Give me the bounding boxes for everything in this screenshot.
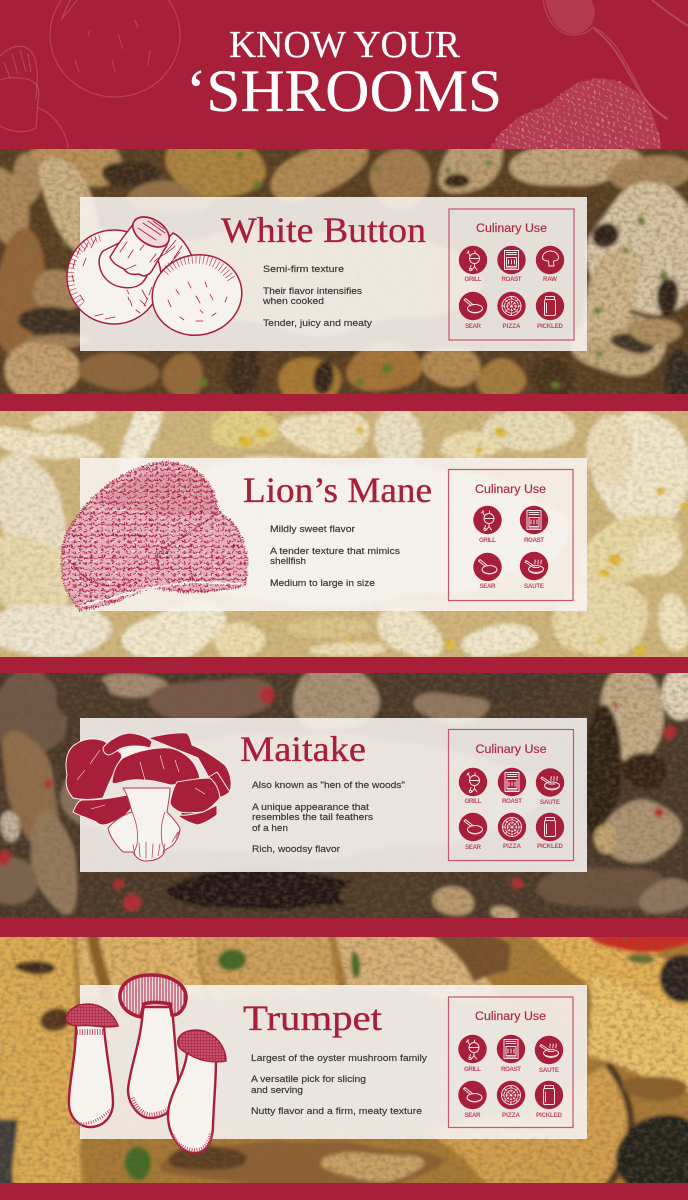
heading: trumpet: Trumpet [243,998,382,1038]
use: roast: ROAST [502,276,522,283]
text: characteristics: A unique appearance that [252,802,369,813]
title [186,24,502,124]
illustration: lion's mane mushroom [62,462,247,610]
title line: know your: KNOW YOUR [229,24,461,66]
use: raw: RAW [543,276,557,283]
culinary use box [448,470,573,600]
illustration: maitake mushroom [66,733,231,861]
text: characteristics [270,524,400,589]
use: sear: SEAR [464,1112,481,1119]
use: sear: SEAR [480,583,496,590]
text: characteristics: Rich, woodsy flavor [252,844,341,855]
text: characteristics: A tender texture that mimics [270,546,400,557]
text: characteristics: Tender, juicy and meaty [263,318,372,329]
text: characteristics: Nutty flavor and a firm, meaty texture [251,1106,422,1117]
header sketch art [0,0,688,149]
use: roast: ROAST [502,798,522,805]
text: characteristics: when cooked [262,296,324,307]
photo: grilled trumpet mushrooms [0,937,688,1183]
text: characteristics: resembles the tail feathers [252,812,373,823]
heading: lion's mane: Lion’s Mane [243,470,432,510]
text: characteristics: Semi-firm texture [263,264,344,275]
culinary use box [448,730,574,860]
heading: white button: White Button [221,210,426,250]
use: saute: SAUTE [524,583,544,590]
text: characteristics: Medium to large in size [270,578,375,589]
culinary use box: Culinary Use [475,1011,546,1023]
use: saute: SAUTE [540,799,560,806]
use: pickled: PICKLED [537,323,564,330]
use: pizza: PIZZA [502,323,521,330]
section 4: trumpet [66,975,587,1153]
illustration: trumpet mushrooms [66,975,226,1153]
heading: maitake: Maitake [240,729,366,769]
right trumpet [168,1030,226,1153]
text: characteristics: A versatile pick for slicing [251,1074,366,1085]
panel background [80,197,587,351]
text: characteristics: shellfish [270,556,306,567]
text: characteristics: Mildly sweet flavor [270,524,356,535]
text: characteristics: of a hen [252,823,288,834]
use: grill: GRILL [464,798,482,805]
photo: maitake [0,673,688,918]
use: pickled: PICKLED [536,1112,563,1119]
section 3: maitake [66,718,587,872]
use: grill: GRILL [464,276,482,283]
use: pizza: PIZZA [503,843,522,850]
use: sear: SEAR [465,323,482,330]
text: characteristics: and serving [251,1085,303,1096]
culinary use box: Culinary Use [475,484,546,496]
text: characteristics [251,1053,427,1117]
section 2: lion's mane [62,458,587,611]
use: roast: ROAST [501,1066,521,1073]
big trumpet [120,975,186,1118]
photo: lion's mane pieces [0,411,688,657]
use: saute: SAUTE [539,1067,559,1074]
use: sear: SEAR [465,844,482,851]
photo: sauteed button mushrooms [0,149,688,394]
section 1: white button [67,197,587,351]
culinary use box [449,209,574,340]
use: grill: GRILL [464,1066,481,1073]
culinary use box [448,997,573,1128]
illustration: white button mushrooms [67,211,249,343]
panel background [80,718,587,872]
left trumpet [66,1004,118,1127]
use: grill: GRILL [479,537,496,544]
use: pickled: PICKLED [537,843,564,850]
title line: shrooms: ‘SHROOMS [186,58,502,124]
panel background [80,458,587,611]
use: roast: ROAST [524,537,544,544]
panel background [80,985,587,1139]
text: characteristics: Their flavor intensifies [263,286,362,297]
culinary use box: Culinary Use [476,223,547,235]
text: characteristics: Largest of the oyster mushroom family [251,1053,427,1064]
culinary use box: Culinary Use [476,744,546,756]
text: characteristics [252,780,405,855]
text: characteristics [262,264,372,329]
text: characteristics: Also known as "hen of the woods" [252,780,405,791]
use: pizza: PIZZA [502,1112,521,1119]
